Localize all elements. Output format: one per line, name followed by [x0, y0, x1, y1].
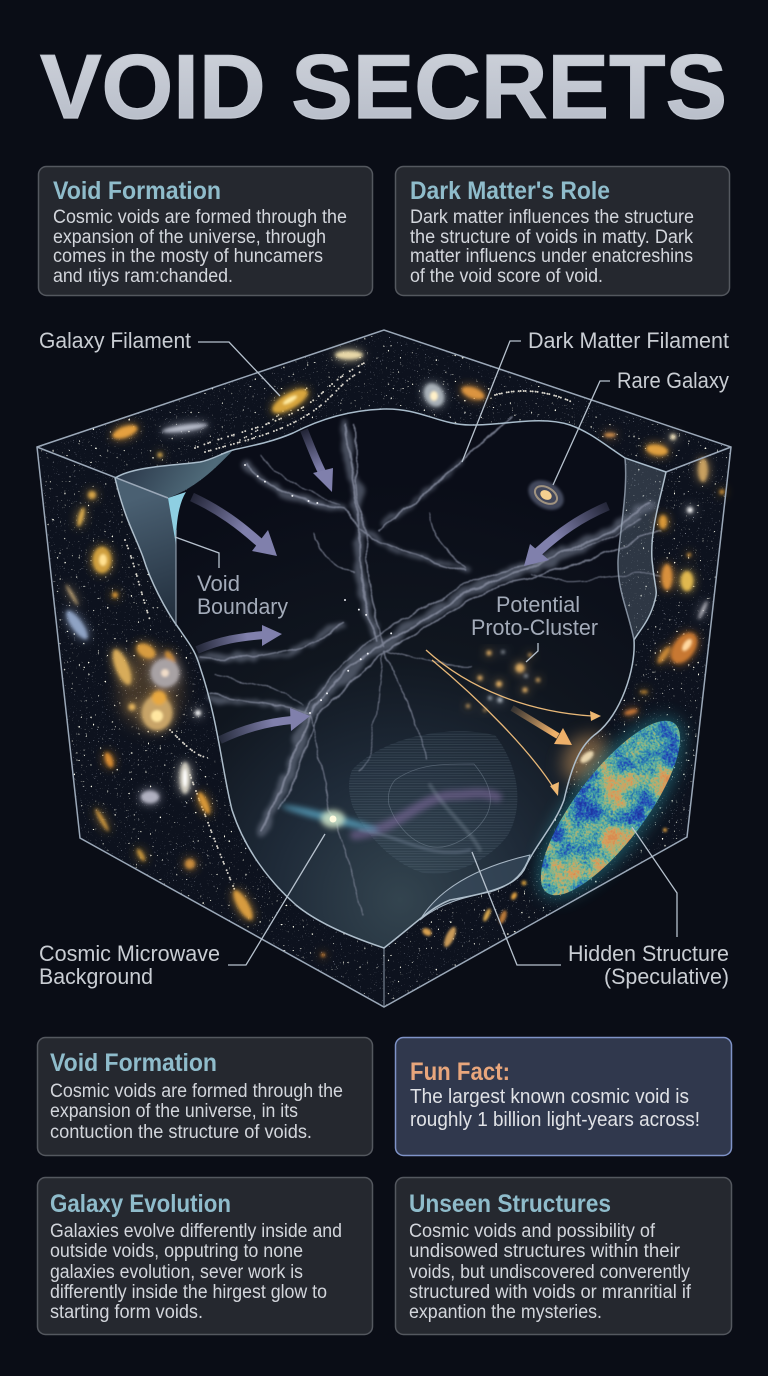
label: cosmic microwave background: Cosmic Microwave [39, 941, 220, 966]
galaxies: right face [624, 458, 724, 716]
label: potential proto-cluster: Proto-Cluster [471, 615, 598, 640]
panel: dark matter's role: of the void score of void. [410, 266, 603, 287]
panel: void formation (bottom): Void Formation [50, 1049, 217, 1077]
panel: galaxy evolution: starting form voids. [50, 1302, 203, 1323]
panel: void formation (bottom) [38, 1038, 372, 1156]
panel: unseen structures: expantion the mysteries. [409, 1302, 602, 1323]
panel: void formation (top): and ıtiys ram:chanded. [53, 266, 233, 287]
panel: void formation (top): Void Formation [53, 177, 221, 205]
cyan highlight [168, 492, 186, 545]
cube faces with star fields [30, 325, 740, 1015]
label: hidden structure: (Speculative) [604, 964, 729, 989]
potential proto-cluster dots [466, 650, 540, 712]
panel: dark matter's role: the structure of voids in matty. Dark [410, 227, 693, 248]
galaxies: left face [63, 491, 325, 957]
panel: void formation (top): comes in the mosty of huncamers [53, 246, 323, 267]
label: dark matter filament [462, 328, 729, 462]
nebula: bright light at void floor [281, 802, 379, 834]
panel: galaxy evolution: outside voids, opputring to none [50, 1241, 303, 1262]
label: void boundary: Boundary [197, 594, 288, 619]
label: void boundary [175, 537, 288, 619]
panel: dark matter's role: Dark Matter's Role [410, 177, 610, 205]
panel: fun fact: The largest known cosmic void is [410, 1085, 689, 1108]
void interior [170, 409, 634, 948]
panel: unseen structures: Unseen Structures [409, 1190, 611, 1218]
panel: galaxy evolution: Galaxy Evolution [50, 1190, 231, 1218]
panel: void formation (bottom): Cosmic voids are formed through the [50, 1081, 343, 1102]
panel: void formation (bottom): contuction the structure of voids. [50, 1122, 312, 1143]
panel: unseen structures [396, 1178, 732, 1334]
top wall shading [115, 450, 233, 498]
panel: fun fact: Fun Fact: [410, 1058, 510, 1086]
right wall shading [618, 458, 666, 640]
panel: unseen structures: Cosmic voids and possibility of [409, 1221, 656, 1242]
panel: galaxy evolution: differently inside the hirgest glow to [50, 1282, 327, 1303]
panel: void formation (top): expansion of the universe, through [53, 227, 326, 248]
label: dark matter filament: Dark Matter Filament [528, 328, 729, 353]
label: rare galaxy [553, 368, 729, 485]
panel: dark matter's role [396, 166, 730, 296]
cube edges and void contour [37, 330, 731, 1007]
panel: galaxy evolution: Galaxies evolve differently inside and [50, 1221, 342, 1242]
cube illustration [30, 325, 740, 1015]
star trails [125, 360, 572, 893]
label: potential proto-cluster [471, 592, 598, 662]
panel: unseen structures: voids, but undiscovered converently [409, 1262, 690, 1283]
purple wave band [355, 785, 497, 852]
label: hidden structure: Hidden Structure [568, 941, 729, 966]
label: galaxy filament [39, 328, 280, 396]
panel: void formation (bottom): expansion of the universe, in its [50, 1101, 298, 1122]
panel: fun fact [396, 1038, 732, 1156]
floor wall [420, 855, 530, 920]
panel: void formation (top): Cosmic voids are formed through the [53, 207, 347, 228]
hidden structure mesh [349, 731, 517, 874]
panel: unseen structures: undisowed structures within their [409, 1241, 681, 1262]
label: hidden structure [472, 827, 729, 989]
panel: dark matter's role: Dark matter influences the structure [410, 207, 694, 228]
left wall shading [115, 478, 176, 626]
label: galaxy filament: Galaxy Filament [39, 328, 191, 353]
inward arrows [192, 430, 608, 740]
label: potential proto-cluster: Potential [496, 592, 580, 617]
panel: galaxy evolution [38, 1178, 372, 1334]
title: VOID SECRETS [40, 37, 727, 138]
panel: unseen structures: structured with voids or mranritial if [409, 1282, 692, 1303]
panel: galaxy evolution: galaxies evolution, sever work is [50, 1262, 303, 1283]
panel: fun fact: roughly 1 billion light-years across! [410, 1108, 700, 1131]
label: cosmic microwave background: Background [39, 964, 153, 989]
label: rare galaxy: Rare Galaxy [617, 368, 729, 393]
orange arrows [426, 650, 601, 796]
panel: dark matter's role: matter influencs under enatcreshins [410, 246, 693, 267]
cosmic microwave oval [529, 710, 692, 906]
galaxies: lower right floor [421, 828, 667, 949]
orange glow galaxy [553, 725, 617, 791]
label: void boundary: Void [197, 571, 240, 596]
label: cosmic microwave background [39, 834, 325, 989]
galaxies: top face [111, 351, 676, 458]
dark matter filaments [200, 415, 660, 915]
rare galaxy [523, 474, 569, 516]
panel: void formation (top) [38, 166, 372, 296]
